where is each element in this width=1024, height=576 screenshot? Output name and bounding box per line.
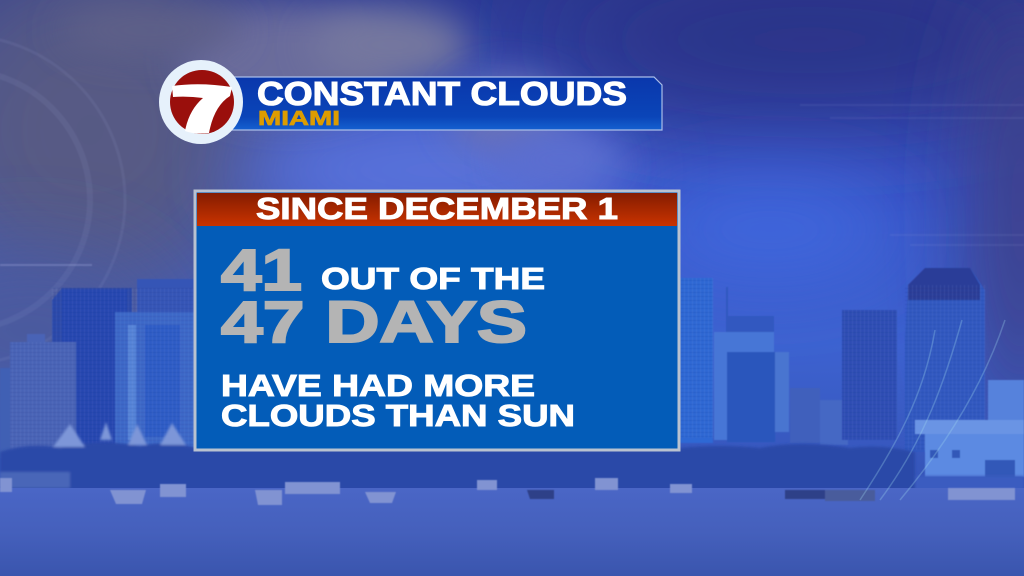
out of the: OUT OF THE bbox=[321, 261, 545, 296]
skyline left bbox=[0, 279, 195, 458]
light streaks right bbox=[860, 320, 1005, 500]
logo: channel 7 bbox=[159, 60, 243, 144]
panel header bbox=[197, 193, 677, 226]
data panel bbox=[195, 191, 679, 450]
water bbox=[0, 488, 1024, 576]
location label: MIAMI bbox=[258, 108, 340, 130]
boats bbox=[0, 478, 1015, 505]
logo numeral bbox=[172, 84, 232, 134]
description line 1: HAVE HAD MORE bbox=[221, 368, 535, 403]
skyline right bbox=[680, 268, 1024, 478]
description line 2: CLOUDS THAN SUN bbox=[221, 398, 575, 433]
header title: CONSTANT CLOUDS bbox=[257, 75, 627, 112]
panel header text: SINCE DECEMBER 1 bbox=[256, 191, 618, 226]
clouds bbox=[60, 5, 620, 190]
header bar bbox=[232, 75, 662, 130]
number 41: 41 bbox=[221, 238, 302, 303]
decorative arcs and lines bbox=[0, 35, 1024, 365]
tree line bbox=[0, 422, 1024, 490]
47 days: 47 DAYS bbox=[221, 290, 527, 355]
